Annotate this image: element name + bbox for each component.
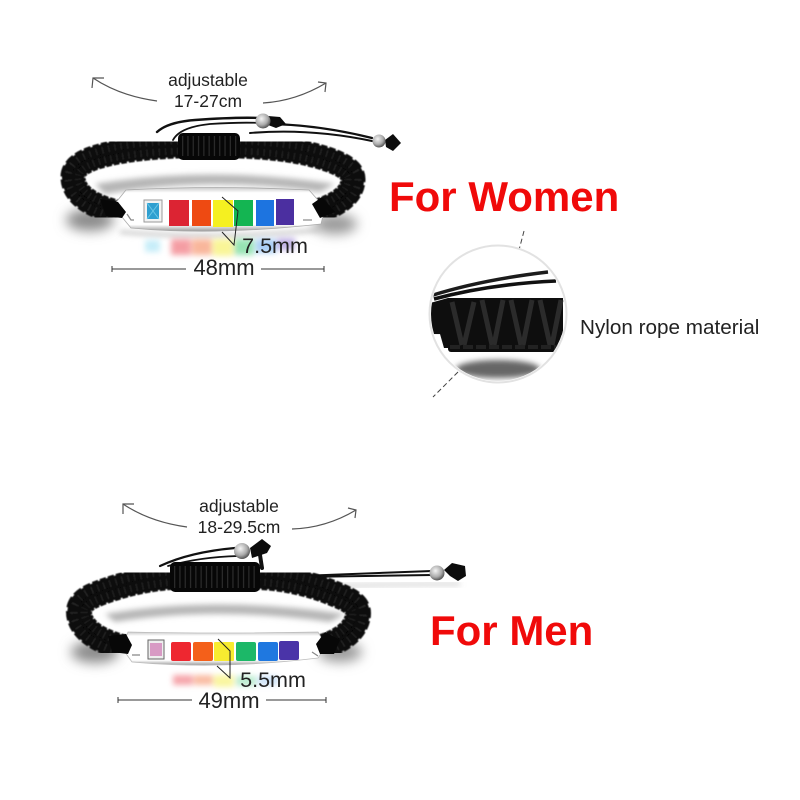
arrow: adjustable right <box>263 82 326 103</box>
rainbow enamel bars <box>169 199 294 227</box>
magnified rope circle <box>430 246 566 382</box>
arrow: adjustable right <box>292 508 356 529</box>
shadow and reflection <box>66 174 357 256</box>
detail callout: nylon rope <box>430 231 759 397</box>
cord end bead and knot <box>372 134 401 151</box>
size label: adjustable 18-29.5cm: 18-29.5cm <box>198 517 280 537</box>
size label: adjustable 17-27cm <box>168 70 248 111</box>
men's bracelet group <box>71 496 466 713</box>
size label: adjustable 17-27cm: adjustable <box>168 70 248 90</box>
size label: adjustable 17-27cm: 17-27cm <box>174 91 242 111</box>
size label: adjustable 18-29.5cm <box>198 496 280 537</box>
dimension: 49mm <box>118 688 326 713</box>
shadow and reflection <box>71 584 460 687</box>
slider bead <box>234 543 250 559</box>
plate knots <box>108 632 340 656</box>
heading: For Men: For Men <box>430 607 593 654</box>
slider knot <box>250 539 271 558</box>
dimension: 5.5mm: 5.5mm <box>240 668 306 692</box>
dimension: 7.5mm: 7.5mm <box>242 234 308 258</box>
braided band <box>79 576 358 649</box>
rainbow enamel bars <box>171 641 299 661</box>
arrow: adjustable left <box>123 504 187 527</box>
dimension: 48mm: 48mm <box>193 255 255 280</box>
blue gem <box>144 200 162 222</box>
cord end bead and knot <box>430 563 466 581</box>
dimension: 48mm <box>112 255 324 280</box>
pendant plate <box>113 188 325 231</box>
dimension: 7.5mm <box>222 197 308 258</box>
caption: Nylon rope material <box>580 316 759 339</box>
sliding knot <box>178 133 240 160</box>
size label: adjustable 18-29.5cm: adjustable <box>199 496 279 516</box>
arrow: adjustable left <box>92 78 157 101</box>
drawstring cords <box>160 548 432 577</box>
heading: For Women: For Women <box>389 173 619 220</box>
women's bracelet group <box>66 70 401 280</box>
sliding knot <box>170 562 260 592</box>
pink gem <box>148 640 164 659</box>
braided band <box>73 145 353 214</box>
callout leader lines <box>433 231 524 397</box>
pendant plate <box>122 632 326 665</box>
slider bead <box>256 114 270 128</box>
slider knot <box>268 116 286 128</box>
dimension: 5.5mm <box>217 639 306 692</box>
dimension: 49mm: 49mm <box>198 688 260 713</box>
plate slots with knots <box>100 197 335 220</box>
drawstring cords <box>157 118 372 141</box>
